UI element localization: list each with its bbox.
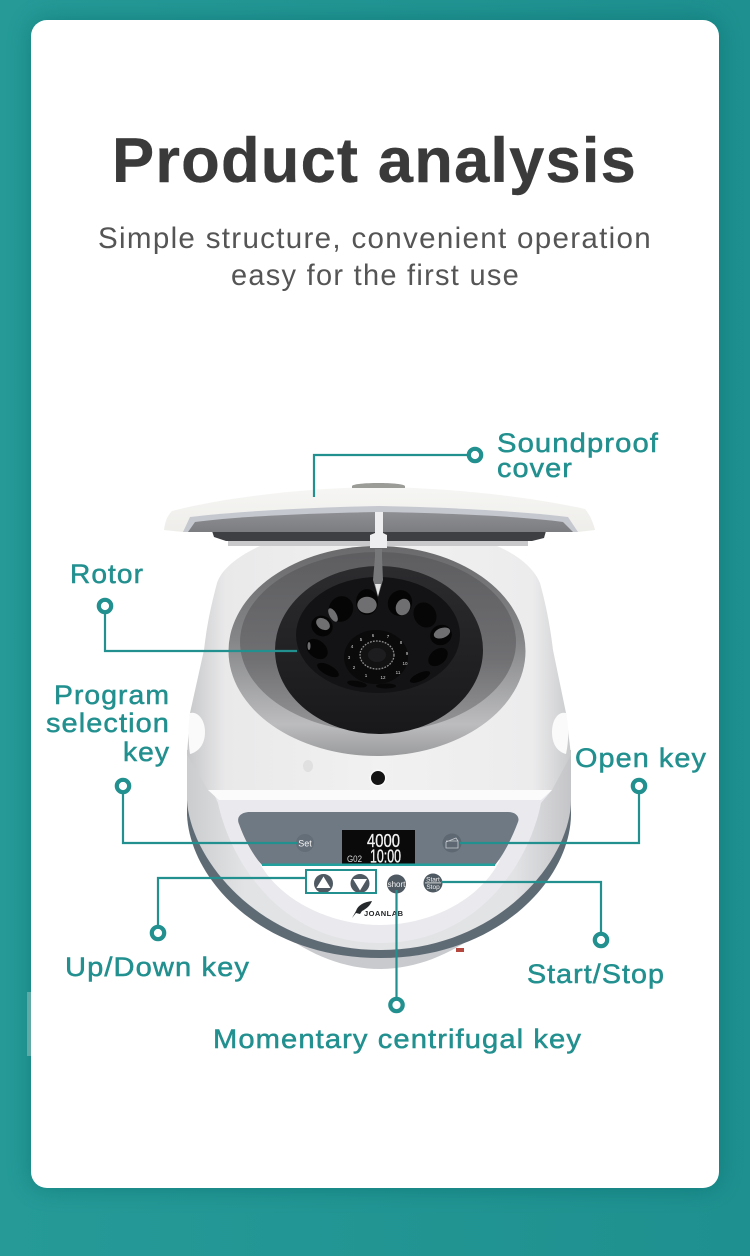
control panel [238, 812, 519, 865]
rotor hub [344, 630, 409, 684]
display: 10:00 [370, 846, 401, 866]
rotor hub: 1 [365, 673, 368, 678]
subtitle: easy for the first use [231, 259, 520, 292]
lid [164, 487, 595, 532]
open button [442, 834, 462, 852]
callout: program selection key: key [123, 737, 170, 767]
logo [352, 901, 404, 918]
display [342, 830, 415, 866]
callout: soundproof cover [314, 428, 659, 497]
base skirt [280, 932, 480, 969]
inner white panel [258, 860, 500, 925]
white strip [208, 790, 552, 800]
display: G02 [347, 854, 362, 864]
callout: program selection key: Program [54, 680, 170, 710]
rotor hub: 12 [380, 675, 386, 680]
small post [303, 760, 313, 772]
rotor hub: 8 [400, 640, 403, 645]
down button [350, 874, 370, 893]
callout: rotor: Rotor [70, 559, 144, 589]
title: Product analysis [112, 126, 637, 196]
side handle left [188, 713, 205, 754]
rotor hub: 7 [387, 634, 390, 639]
rotor holes [302, 586, 455, 689]
callout: program selection key [46, 680, 297, 843]
callout: momentary centrifugal key: Momentary centrifugal key [213, 1024, 582, 1054]
start stop button: Start [426, 876, 440, 884]
centrifuge illustration [164, 483, 595, 969]
subtitle: Simple structure, convenient operation [98, 222, 652, 255]
set button [296, 834, 314, 852]
rotor hub: 2 [353, 665, 356, 670]
rotor plate [296, 577, 460, 693]
callout: start/stop: Start/Stop [527, 959, 665, 989]
rotor hub: 9 [406, 651, 409, 656]
up button [314, 874, 333, 893]
display: 4000 [367, 831, 400, 851]
short button: short [388, 880, 406, 889]
upper body shell [187, 546, 571, 790]
callout: start/stop [441, 882, 665, 989]
start stop button [424, 874, 442, 892]
lid underside [212, 531, 546, 546]
front ring [212, 790, 552, 943]
rotor hub: 10 [402, 661, 408, 666]
rotor hub: 11 [396, 670, 401, 675]
edge artifact [27, 992, 31, 1056]
start stop button: Stop [426, 884, 440, 891]
bowl [275, 566, 483, 734]
subtitle [98, 222, 652, 292]
callout: open key [460, 743, 707, 843]
callout: open key: Open key [575, 743, 707, 773]
set button: Set [298, 838, 312, 848]
lower body shell [187, 750, 571, 950]
red foot [456, 948, 464, 952]
logo: JOANLAB [364, 909, 404, 918]
callout: up/down key [65, 870, 376, 982]
lid knob [352, 483, 405, 488]
chamber inner ring [240, 552, 516, 732]
callout: momentary centrifugal key [213, 890, 582, 1054]
rotor hub: 4 [351, 644, 354, 649]
chamber [228, 546, 526, 756]
rotor hub: 3 [348, 655, 351, 660]
keyhole [370, 770, 386, 786]
callout: soundproof cover: Soundproof [497, 428, 659, 458]
lid support arm [370, 512, 387, 548]
short button [387, 874, 406, 894]
lid inner band [183, 506, 578, 532]
callout: soundproof cover: cover [497, 453, 573, 483]
callout: rotor [70, 559, 297, 651]
dark band [187, 790, 571, 958]
side handle right [552, 713, 568, 754]
accent line [262, 864, 495, 866]
callout: up/down key: Up/Down key [65, 952, 250, 982]
lid inner face [188, 512, 573, 532]
needle [373, 549, 383, 597]
rotor hub: 6 [372, 633, 375, 638]
callout: program selection key: selection [46, 708, 170, 738]
rotor hub: 5 [360, 637, 363, 642]
